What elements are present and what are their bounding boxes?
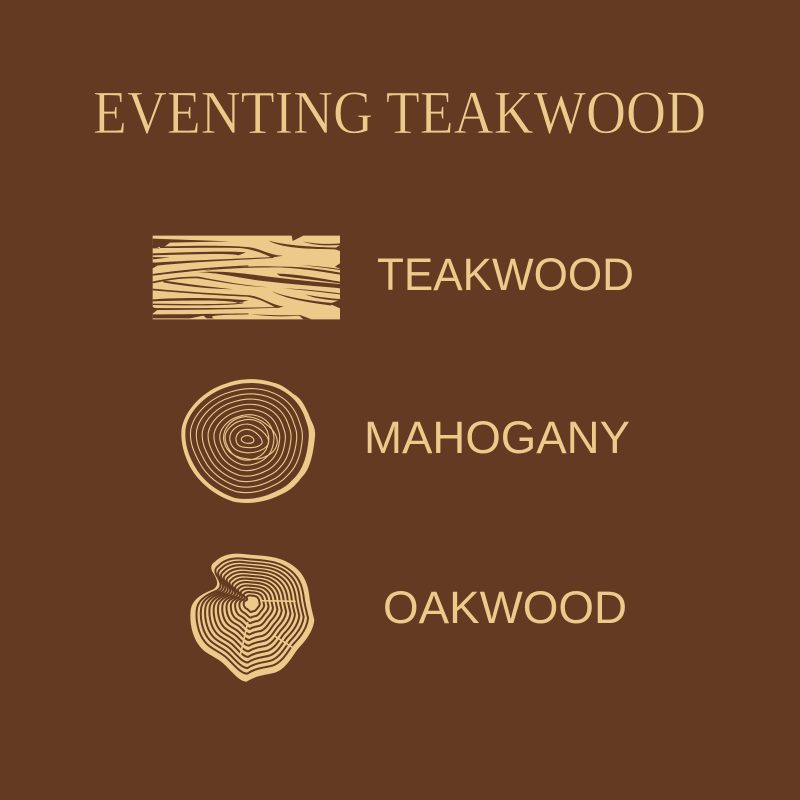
icon: oakwood tree rings [190, 554, 314, 682]
title: EVENTING TEAKWOOD [93, 80, 706, 147]
label: teakwood: TEAKWOOD [377, 249, 634, 300]
icon: teakwood plank [153, 236, 340, 319]
label: mahogany: MAHOGANY [364, 412, 630, 463]
icon: mahogany tree rings [181, 379, 315, 503]
label: oakwood: OAKWOOD [383, 582, 627, 633]
